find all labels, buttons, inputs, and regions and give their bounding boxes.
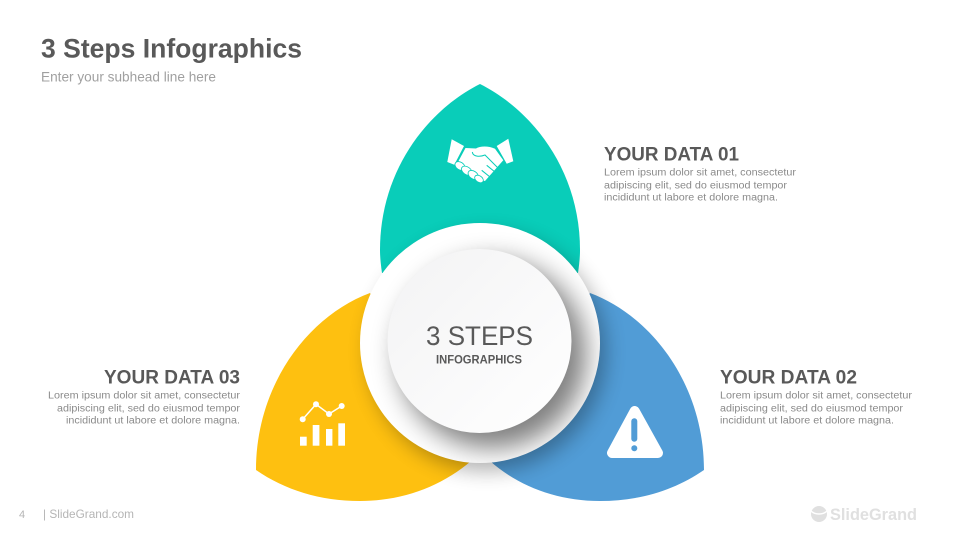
text block: your data 01: adipiscing elit, sed do eiusmod tempor <box>604 180 788 192</box>
center inner disc <box>388 249 572 433</box>
text block: your data 02 <box>720 368 913 426</box>
text block: your data 01: incididunt ut labore et dolore magna. <box>604 192 778 204</box>
title: 3 Steps Infographics <box>41 34 302 64</box>
icon: chart <box>300 401 345 446</box>
text block: your data 03: Lorem ipsum dolor sit amet, consectetur <box>48 390 241 402</box>
text block: your data 02: YOUR DATA 02 <box>720 368 857 388</box>
center outer ring <box>360 223 600 463</box>
text block: your data 03: YOUR DATA 03 <box>104 368 240 388</box>
icon: handshake <box>447 139 513 184</box>
footer: site name: | SlideGrand.com <box>43 507 134 521</box>
petal: teal top <box>380 84 580 273</box>
center circle shadow <box>368 233 606 471</box>
text block: your data 01 <box>604 144 797 204</box>
text block: your data 01: YOUR DATA 01 <box>604 144 739 166</box>
footer: page number: 4 <box>19 509 25 521</box>
text block: your data 03: incididunt ut labore et dolore magna. <box>66 416 240 426</box>
center label: infographics: INFOGRAPHICS <box>436 354 522 366</box>
text block: your data 02: incididunt ut labore et dolore magna. <box>720 416 894 426</box>
center label: 3 steps: 3 STEPS <box>426 321 533 351</box>
petal: yellow left <box>256 293 471 501</box>
text block: your data 01: Lorem ipsum dolor sit amet, consectetur <box>604 168 797 178</box>
petal: blue right <box>490 293 704 501</box>
text block: your data 02: adipiscing elit, sed do eiusmod tempor <box>720 404 904 414</box>
text block: your data 02: Lorem ipsum dolor sit amet, consectetur <box>720 390 913 402</box>
icon: warning <box>612 411 658 453</box>
subtitle: Enter your subhead line here <box>41 68 216 84</box>
footer: logo: SlideGrand <box>830 506 917 524</box>
center inner disc shadow <box>398 260 586 448</box>
text block: your data 03: adipiscing elit, sed do eiusmod tempor <box>57 404 241 414</box>
text block: your data 03 <box>48 368 241 426</box>
